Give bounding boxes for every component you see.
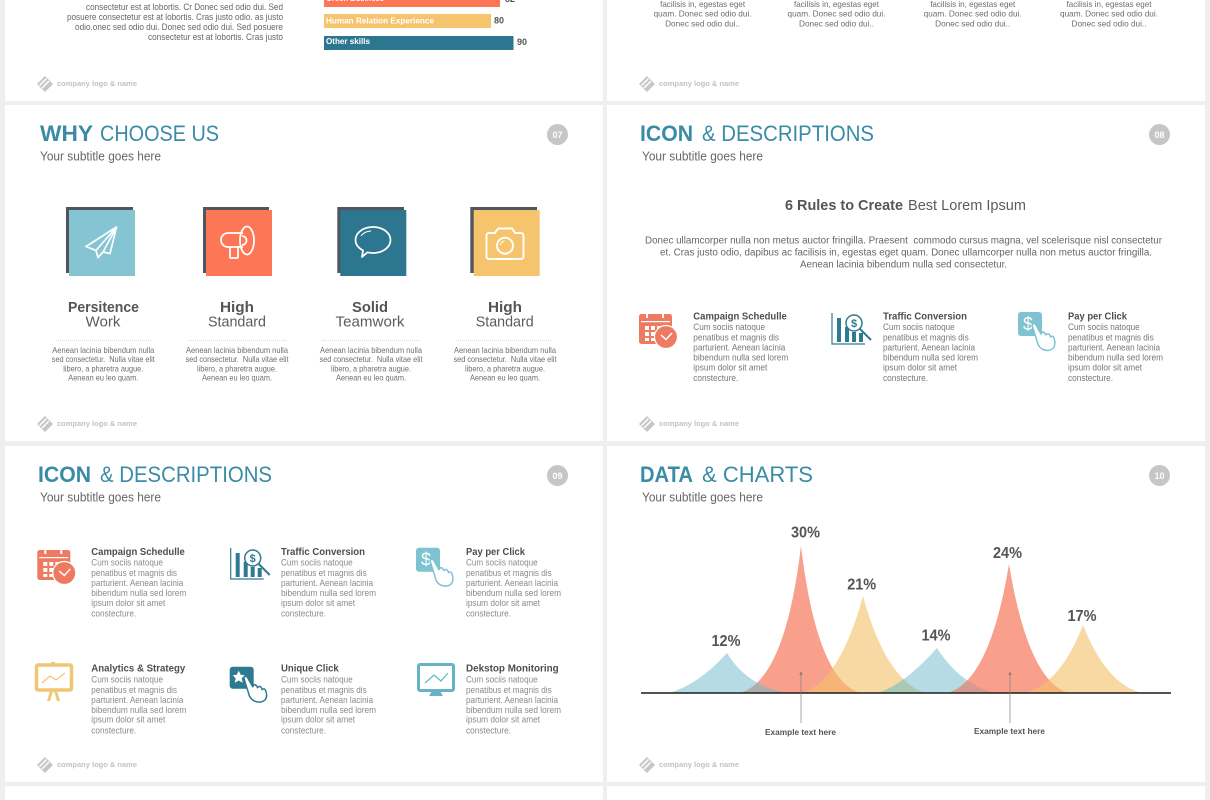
item: pay per click: constecture.	[466, 608, 511, 618]
panel: icon and descriptions 08	[607, 105, 1205, 441]
text block: solid teamwork: Aenean eu leo quam.	[336, 373, 406, 382]
item: campaign schedulle: ipsum dolor sit amet	[91, 598, 166, 608]
icon: megaphone	[203, 207, 272, 276]
item: pay per click: bibendum nulla sed lorem	[1068, 352, 1163, 362]
item: campaign schedulle	[91, 547, 187, 618]
icon: desktop monitor	[418, 664, 454, 696]
item: traffic conversion: parturient. Aenean lacinia	[883, 342, 976, 352]
page number 08	[1149, 124, 1170, 145]
text block: high standard: libero, a pharetra augue.	[465, 364, 545, 373]
item: traffic conversion: ipsum dolor sit amet	[281, 598, 355, 608]
icon: pay per click	[416, 548, 453, 586]
item: traffic conversion: constecture.	[281, 608, 326, 618]
text block: intro paragraph	[645, 236, 1163, 270]
item: dekstop monitoring: penatibus et magnis dis	[466, 685, 552, 695]
item: traffic conversion: penatibus et magnis dis	[281, 568, 367, 578]
item: traffic conversion: constecture.	[883, 373, 928, 383]
heading: icon and descriptions: & DESCRIPTIONS	[702, 121, 874, 146]
icon: camera	[470, 207, 540, 276]
text block: column 3: Donec sed odio dui..	[935, 19, 1010, 28]
text block: high standard	[454, 299, 557, 382]
text block: persitence work: Aenean lacinia bibendum nulla	[52, 346, 155, 355]
heading: icon and descriptions: ICON	[640, 121, 693, 146]
chart: peak area chart: 17%	[1068, 608, 1097, 625]
text block: solid teamwork: Aenean lacinia bibendum nulla	[320, 346, 422, 355]
text block: persitence work	[52, 299, 155, 382]
item: analytics and strategy: Cum sociis natoque	[91, 674, 163, 684]
page number 07	[547, 124, 568, 145]
text block: column 1	[654, 0, 752, 28]
text block: persitence work: Aenean eu leo quam.	[68, 373, 138, 382]
logo: company: company logo & name	[57, 79, 137, 88]
item: pay per click: Cum sociis natoque	[1068, 322, 1140, 332]
item: pay per click: ipsum dolor sit amet	[1068, 362, 1142, 372]
item: traffic conversion: bibendum nulla sed lorem	[281, 588, 376, 598]
item: traffic conversion	[281, 547, 376, 618]
text block: right aligned paragraph	[67, 2, 283, 42]
item: pay per click: parturient. Aenean lacinia	[466, 578, 559, 588]
bar chart: skills: Human Relation Experience	[326, 16, 434, 26]
item: campaign schedulle: bibendum nulla sed lorem	[693, 352, 789, 362]
text block: high standard: Aenean eu leo quam.	[470, 373, 540, 382]
item: campaign schedulle: constecture.	[693, 373, 738, 383]
item: traffic conversion: Traffic Conversion	[883, 312, 967, 322]
item: unique click: parturient. Aenean lacinia	[281, 695, 374, 705]
logo: company	[37, 757, 137, 773]
text block: intro paragraph: et. Cras justo odio, dapibus ac facilisis in, egestas eget quam. Donec ullamcorper nulla non metus auctor fringilla.	[660, 248, 1152, 258]
item: campaign schedulle: bibendum nulla sed lorem	[91, 588, 187, 598]
chart: peak area chart: 12%	[712, 633, 741, 650]
text block: high standard	[186, 299, 289, 382]
item: unique click: bibendum nulla sed lorem	[281, 705, 376, 715]
heading: 6 rules: Best Lorem Ipsum	[908, 197, 1026, 214]
icon: paper plane	[66, 207, 135, 276]
heading: 6 rules	[785, 197, 1026, 214]
text block: intro paragraph: Aenean lacinia bibendum nulla sed consectetur.	[800, 260, 1007, 270]
text block: column 4	[1060, 0, 1158, 28]
text block: high standard: Aenean eu leo quam.	[202, 373, 272, 382]
item: traffic conversion: Cum sociis natoque	[883, 322, 955, 332]
page number 07: 07	[552, 130, 563, 140]
item: traffic conversion: Traffic Conversion	[281, 547, 365, 558]
item: campaign schedulle: parturient. Aenean lacinia	[693, 342, 786, 352]
page number 10: 10	[1154, 471, 1165, 481]
text block: solid teamwork: sed consectetur. Nulla vitae elit	[320, 355, 423, 364]
heading: icon and descriptions	[640, 121, 874, 146]
item: analytics and strategy: constecture.	[91, 725, 136, 735]
text block: column 3: facilisis in, egestas eget	[930, 0, 1016, 9]
item: traffic conversion: penatibus et magnis dis	[883, 332, 969, 342]
text block: right aligned paragraph: consectetur est at lobortis. Cr Donec sed odio dui. Sed	[86, 2, 283, 12]
subtitle: Your subtitle goes here	[40, 148, 161, 164]
icon: traffic chart	[231, 548, 270, 579]
page number 10	[1149, 465, 1170, 486]
item: dekstop monitoring: Dekstop Monitoring	[466, 664, 559, 674]
text block: persitence work: Work	[86, 314, 121, 330]
logo: company: company logo & name	[659, 419, 739, 428]
item: pay per click: ipsum dolor sit amet	[466, 598, 540, 608]
item: pay per click: bibendum nulla sed lorem	[466, 588, 561, 598]
text block: high standard: Aenean lacinia bibendum nulla	[454, 346, 556, 355]
text block: intro paragraph: Donec ullamcorper nulla non metus auctor fringilla. Praesent commodo cursus magna, vel scelerisque nisl consectetur	[645, 236, 1163, 246]
text block: right aligned paragraph: consectetur est at lobortis. Cras justo	[148, 32, 283, 42]
item: dekstop monitoring: constecture.	[466, 725, 511, 735]
item: unique click	[281, 664, 376, 735]
text block: column 4: quam. Donec sed odio dui.	[1060, 10, 1158, 19]
bar chart: skills: Other skills	[326, 37, 370, 46]
item: analytics and strategy: parturient. Aenean lacinia	[91, 695, 184, 705]
heading: data and charts: & CHARTS	[702, 462, 813, 487]
heading: data and charts: DATA	[640, 462, 693, 487]
heading: icon and descriptions	[38, 462, 272, 487]
item: pay per click: Pay per Click	[466, 547, 525, 558]
text block: column 3	[924, 0, 1022, 28]
chart: peak area chart	[641, 524, 1171, 693]
text block: right aligned paragraph: posuere consectetur est at lobortis. Cras justo odio. as justo	[67, 12, 283, 22]
bar chart: skills: 90	[517, 37, 527, 47]
chart: peak area chart: 24%	[993, 545, 1022, 562]
item: pay per click	[1068, 312, 1163, 383]
panel: bottom right slide edge	[607, 786, 1205, 800]
item: campaign schedulle: constecture.	[91, 608, 136, 618]
subtitle: Your subtitle goes here	[642, 490, 763, 504]
text block: column 4: facilisis in, egestas eget	[1066, 0, 1152, 9]
arrow: first callout	[765, 672, 836, 737]
text block: high standard: sed consectetur. Nulla vitae elit	[454, 355, 557, 364]
logo: company: company logo & name	[659, 79, 739, 88]
bar chart: skills: 80	[494, 16, 504, 26]
item: traffic conversion	[883, 312, 978, 383]
heading: why choose us: CHOOSE US	[100, 121, 219, 146]
item: pay per click	[466, 547, 561, 618]
text block: column 4: Donec sed odio dui..	[1072, 19, 1146, 28]
chart: peak area chart: 14%	[922, 628, 951, 644]
text block: column 1: quam. Donec sed odio dui.	[654, 10, 752, 19]
item: campaign schedulle: penatibus et magnis dis	[91, 568, 177, 578]
item: pay per click: Cum sociis natoque	[466, 558, 538, 568]
text block: high standard: sed consectetur. Nulla vitae elit	[186, 355, 289, 364]
item: unique click: Unique Click	[281, 664, 339, 674]
item: campaign schedulle: penatibus et magnis dis	[693, 332, 779, 342]
panel: descriptions slide (top right)	[607, 0, 1205, 101]
text block: high standard: Aenean lacinia bibendum nulla	[186, 346, 288, 355]
text block: solid teamwork: libero, a pharetra augue.	[331, 364, 411, 373]
text block: column 3: quam. Donec sed odio dui.	[924, 10, 1022, 19]
icon: star click	[230, 667, 267, 702]
panel: bottom left slide edge	[5, 786, 603, 800]
logo: company	[37, 76, 137, 92]
item: dekstop monitoring: parturient. Aenean lacinia	[466, 695, 559, 705]
item: campaign schedulle: Campaign Schedulle	[693, 312, 787, 322]
panel: data and charts	[607, 446, 1205, 782]
item: campaign schedulle	[693, 312, 789, 383]
page number 09: 09	[552, 471, 563, 481]
item: dekstop monitoring: ipsum dolor sit amet	[466, 715, 540, 725]
item: unique click: ipsum dolor sit amet	[281, 715, 355, 725]
text block: high standard: High	[220, 299, 254, 316]
item: traffic conversion: Cum sociis natoque	[281, 558, 353, 568]
text block: persitence work: libero, a pharetra augue.	[63, 364, 143, 373]
item: campaign schedulle: ipsum dolor sit amet	[693, 362, 768, 372]
item: analytics and strategy: bibendum nulla sed lorem	[91, 705, 187, 715]
item: campaign schedulle: parturient. Aenean lacinia	[91, 578, 184, 588]
text block: solid teamwork: Solid	[352, 299, 388, 316]
item: pay per click: constecture.	[1068, 373, 1113, 383]
arrow: first callout: Example text here	[765, 727, 836, 737]
item: unique click: Cum sociis natoque	[281, 674, 353, 684]
item: analytics and strategy: penatibus et magnis dis	[91, 685, 177, 695]
text block: column 2: quam. Donec sed odio dui.	[788, 10, 886, 19]
item: campaign schedulle: Campaign Schedulle	[91, 547, 185, 558]
logo: company	[639, 76, 739, 92]
item: analytics and strategy: ipsum dolor sit amet	[91, 715, 166, 725]
icon: traffic chart	[832, 313, 871, 344]
text block: column 1: facilisis in, egestas eget	[660, 0, 746, 9]
item: traffic conversion: ipsum dolor sit amet	[883, 362, 957, 372]
item: dekstop monitoring	[466, 664, 561, 735]
icon: pay per click	[1018, 312, 1055, 350]
logo: company: company logo & name	[57, 419, 137, 428]
page number 09	[547, 465, 568, 486]
heading: icon and descriptions: ICON	[38, 462, 91, 487]
chart: peak area chart: 21%	[847, 576, 876, 594]
heading: why choose us	[40, 121, 219, 146]
text block: high standard: libero, a pharetra augue.	[197, 364, 277, 373]
icon: presentation easel	[36, 662, 72, 701]
item: traffic conversion: parturient. Aenean lacinia	[281, 578, 374, 588]
subtitle: Your subtitle goes here	[642, 148, 763, 164]
item: unique click: constecture.	[281, 725, 326, 735]
text block: persitence work: Persitence	[68, 299, 139, 316]
item: traffic conversion: bibendum nulla sed lorem	[883, 352, 978, 362]
logo: company: company logo & name	[57, 760, 137, 769]
item: analytics and strategy: Analytics & Strategy	[91, 664, 186, 674]
logo: company: company logo & name	[659, 760, 739, 769]
text block: high standard: High	[488, 299, 522, 316]
text block: right aligned paragraph: odio.onec sed odio dui. Donec sed odio dui. Sed posuere	[75, 22, 283, 32]
item: campaign schedulle: Cum sociis natoque	[91, 558, 163, 568]
icon: calendar clock	[639, 313, 678, 348]
panel: why choose us	[5, 105, 603, 441]
item: pay per click: Pay per Click	[1068, 312, 1127, 322]
item: dekstop monitoring: bibendum nulla sed lorem	[466, 705, 561, 715]
item: dekstop monitoring: Cum sociis natoque	[466, 674, 538, 684]
logo: company	[37, 416, 137, 432]
item: pay per click: parturient. Aenean lacinia	[1068, 342, 1161, 352]
panel: skills slide (top left)	[5, 0, 603, 101]
icon: calendar clock	[37, 549, 76, 584]
subtitle: Your subtitle goes here	[40, 490, 161, 504]
text block: solid teamwork: Teamwork	[336, 314, 405, 330]
item: campaign schedulle: Cum sociis natoque	[693, 322, 765, 332]
text block: column 2	[788, 0, 886, 28]
heading: icon and descriptions: & DESCRIPTIONS	[100, 462, 272, 487]
icon: speech bubble	[337, 207, 406, 276]
bar chart: skills	[324, 0, 527, 50]
chart: peak area chart: 30%	[791, 524, 820, 542]
item: pay per click: penatibus et magnis dis	[466, 568, 552, 578]
heading: data and charts	[640, 462, 813, 487]
text block: column 1: Donec sed odio dui..	[665, 19, 740, 28]
item: analytics and strategy	[91, 664, 187, 735]
text block: column 2: Donec sed odio dui..	[799, 19, 874, 28]
heading: 6 rules: 6 Rules to Create	[785, 197, 903, 214]
arrow: second callout: Example text here	[974, 726, 1045, 736]
panel: icon and descriptions 09	[5, 446, 603, 782]
page number 08: 08	[1154, 130, 1165, 140]
text block: high standard: Standard	[208, 314, 266, 330]
logo: company	[639, 757, 739, 773]
text block: column 2: facilisis in, egestas eget	[794, 0, 880, 9]
heading: why choose us: WHY	[40, 121, 93, 146]
arrow: second callout	[974, 672, 1045, 736]
item: unique click: penatibus et magnis dis	[281, 685, 367, 695]
text block: high standard: Standard	[476, 314, 534, 330]
logo: company	[639, 416, 739, 432]
text block: persitence work: sed consectetur. Nulla vitae elit	[52, 355, 155, 364]
item: pay per click: penatibus et magnis dis	[1068, 332, 1154, 342]
text block: solid teamwork	[320, 299, 423, 382]
